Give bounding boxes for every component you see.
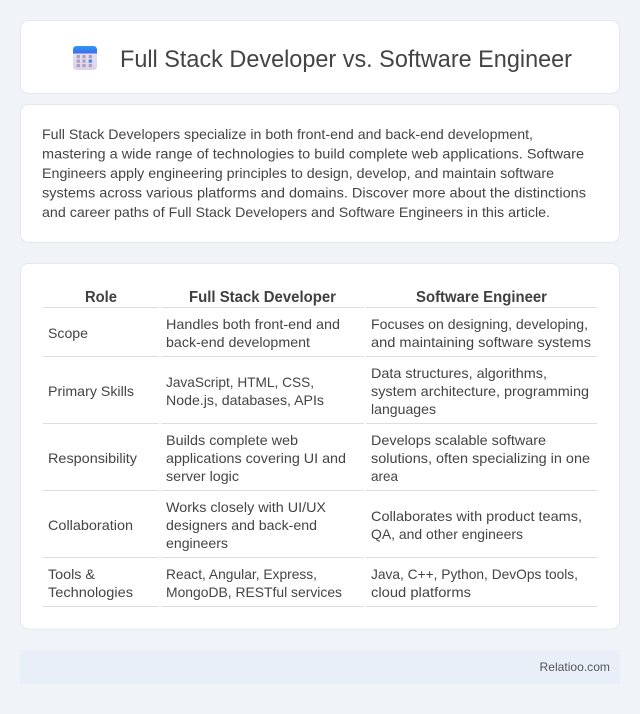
table row: collaboration: QA, and other engineers (371, 526, 523, 542)
text block: introduction: Full Stack Developers specialize in both front-end and back-end development, (42, 126, 533, 142)
table row: primary skills (48, 365, 589, 417)
table row: responsibility: solutions, often specializing in one (371, 450, 590, 466)
table row: primary skills: system architecture, programming (371, 383, 589, 399)
text block: introduction (42, 126, 586, 220)
table row: tools and technologies: cloud platforms (371, 584, 471, 600)
table row: collaboration (48, 499, 582, 551)
table row: tools and technologies: MongoDB, RESTful services (166, 584, 342, 600)
table row: tools and technologies (48, 566, 578, 600)
table row: collaboration: Works closely with UI/UX (166, 499, 327, 515)
table header row: Software Engineer (416, 289, 547, 306)
table row: tools and technologies: Technologies (48, 584, 133, 600)
panel: title card (20, 20, 620, 94)
title: Full Stack Developer vs. Software Engineer (120, 46, 572, 73)
text block: introduction: and career paths of Full Stack Developers and Software Engineers in this article. (42, 204, 550, 220)
table row: tools and technologies: React, Angular, Express, (166, 566, 317, 582)
table row: scope: and maintaining software systems (371, 334, 591, 350)
table row: responsibility: Builds complete web (166, 432, 298, 448)
table row: scope: back-end development (166, 334, 310, 350)
table row: responsibility: Responsibility (48, 450, 137, 466)
table row: scope: Focuses on designing, developing, (371, 316, 588, 332)
table row: tools and technologies: Java, C++, Python, DevOps tools, (371, 566, 578, 582)
table row: primary skills: languages (371, 401, 436, 417)
table row: collaboration: Collaborates with product teams, (371, 508, 582, 524)
table header row: Role (85, 289, 117, 306)
table header row (85, 289, 547, 306)
table row: responsibility: area (371, 468, 398, 484)
table row: tools and technologies: Tools & (48, 566, 96, 582)
table row: primary skills: Node.js, databases, APIs (166, 392, 324, 408)
table header row: Full Stack Developer (189, 289, 336, 306)
table row: primary skills: Data structures, algorithms, (371, 365, 547, 381)
text block: introduction: Engineers apply engineering principles to design, develop, and maintain software (42, 165, 554, 181)
footer credit: Relatioo.com (540, 660, 610, 674)
footer bar (20, 650, 620, 684)
table row: collaboration: Collaboration (48, 517, 133, 533)
table row: responsibility: Develops scalable software (371, 432, 546, 448)
table row: responsibility: server logic (166, 468, 239, 484)
table row: primary skills: JavaScript, HTML, CSS, (166, 374, 314, 390)
text block: introduction: systems across various platforms and domains. Discover more about the distinctions (42, 185, 586, 201)
icon: calendar (73, 46, 97, 70)
panel: introduction card (20, 104, 620, 242)
table row: scope: Handles both front-end and (166, 316, 340, 332)
text block: introduction: mastering a wide range of technologies to build complete web applications. Software (42, 146, 584, 162)
table row: primary skills: Primary Skills (48, 383, 134, 399)
table row: collaboration: designers and back-end (166, 517, 317, 533)
panel: comparison table (20, 264, 620, 629)
table row: responsibility (48, 432, 590, 484)
table row: responsibility: applications covering UI and (166, 450, 346, 466)
table row: scope: Scope (48, 325, 88, 341)
table row: scope (48, 316, 591, 350)
table row: collaboration: engineers (166, 535, 228, 551)
